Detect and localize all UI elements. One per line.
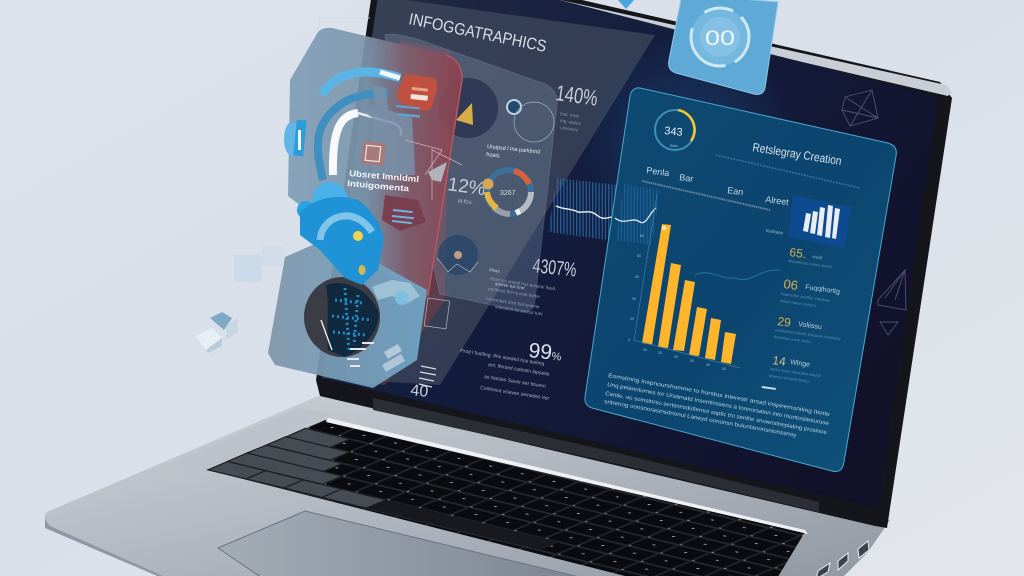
side metric list: 29 (777, 314, 792, 330)
donut chart: 3267 (500, 190, 516, 197)
bottle-shaped grey motif (360, 84, 415, 175)
square icon (361, 141, 386, 166)
Y axis ticks: 20 (674, 355, 678, 359)
gauge: Stats (670, 144, 678, 148)
small blue strips (396, 105, 420, 118)
side metric list: wuid (812, 254, 823, 261)
stat: 140%: 140% (554, 80, 599, 111)
label rule (642, 181, 770, 210)
panel footnote: Itluss (489, 267, 501, 274)
card label: Ubsret Imnldml (349, 168, 419, 184)
grey light wedge (322, 0, 655, 385)
waveform tail (615, 208, 656, 223)
chart trend line (695, 270, 780, 280)
wireframe decor icons (842, 90, 906, 335)
column labels: Ean (727, 185, 744, 197)
column labels (646, 165, 790, 207)
stat: 4307%: Ibism tai stated hus ausprei fosid (490, 276, 556, 291)
red app icon (398, 74, 437, 110)
stat: 4307%: stanotion su soveur tuer (495, 304, 544, 317)
screen surface (322, 0, 938, 508)
Y axis ticks: 20 (630, 317, 634, 321)
side metric list: hownsnter seurtler checkwu (781, 291, 831, 303)
side metric list: 14 (772, 353, 787, 369)
Y axis ticks: 60 (637, 254, 641, 258)
Y axis ticks: 50 (722, 367, 726, 371)
Y axis ticks: 40 (706, 363, 710, 367)
hinge bar (373, 398, 819, 512)
left blue tabs (284, 122, 300, 156)
stat: 99%: Prod I fustling. Ifrin seeded hos testing (460, 348, 545, 367)
light arrow shard (428, 162, 447, 182)
stat: 99%: Conbosut visaves semades Iter (480, 385, 550, 402)
Y axis ticks: 80 (640, 234, 644, 238)
side metric list: shsoatnces nunes stores (788, 258, 832, 269)
red panel line diagram (405, 140, 462, 200)
yellow bar chart (642, 224, 736, 364)
thin ring (514, 102, 554, 142)
side metric list: Wlnge (790, 359, 810, 369)
side metric list: Fuqqlhoritg (805, 284, 840, 296)
side metric list: bnwner strossim lnstes (769, 373, 810, 384)
Y axis ticks (628, 234, 726, 371)
floating cube (196, 312, 238, 353)
top floating badge: 00 (705, 27, 735, 50)
panel body text: Unq pelanoturnes tor Ursamatd Insontinssens a tonnorsalon into muntoslaniumoe (607, 382, 829, 427)
stat: 99% (460, 339, 563, 402)
Y axis ticks: 10 (658, 351, 662, 355)
card label (347, 168, 419, 193)
stat: 99%: anl. Ifersed cutestin lapsetle (488, 362, 550, 378)
side metric list: Voliissu (798, 321, 822, 331)
Y axis ticks: 30 (632, 297, 636, 301)
column labels: Alreet (765, 194, 790, 207)
panel body text: Eomstinng Inspnourshomme to hurstus interestr arssd inspiremoniting Itsrite (608, 373, 830, 418)
panel footnote (489, 267, 526, 291)
stat: 140%: Inst. treat (560, 111, 580, 119)
laptop lid and screen (316, 0, 952, 528)
Y axis ticks: 40 (635, 275, 639, 279)
glass panel: analytics: frosts (486, 152, 500, 159)
stat: 140%: uncovery (560, 125, 579, 133)
speaker grille strip (166, 408, 331, 473)
blue blob cluster (284, 120, 420, 305)
panel body text: Cantle, oo somstnrsu sertsnnsdutlernot saptic tro senthe snownstneplating prosinoe (605, 391, 827, 436)
stat: 4307%: 4307% (531, 255, 578, 282)
stat: 12%: pt.fCo. (458, 198, 473, 206)
blue arc dial (318, 72, 401, 180)
stat: 140% (554, 80, 599, 133)
white connector (372, 280, 420, 303)
glass panel: lower hexagon (268, 242, 450, 388)
Y axis ticks: 00 (643, 348, 647, 352)
panel caption: Utuipsd l Ina parldnnd (487, 144, 541, 156)
panel title: Retslegray Creation (752, 140, 843, 168)
stat: 4307%: parthoce thin sureat thene (488, 286, 541, 299)
stat: 99%: 99% (527, 339, 563, 365)
donut chart (486, 170, 531, 214)
glass panel: analytics (385, 34, 557, 312)
glass panel: main (288, 18, 462, 302)
chart axis (634, 195, 740, 368)
side metric list: Kelizase (766, 228, 784, 235)
red side glow (345, 40, 450, 385)
screen heading: INFOGGATRAPHICS (407, 10, 548, 56)
top floating badge (618, 0, 778, 94)
chart icon (788, 195, 851, 248)
striped chart overlay (616, 184, 660, 245)
Y axis ticks: 0 (628, 338, 630, 342)
small label chips (347, 342, 405, 372)
card label: Intuigomenta (347, 178, 410, 193)
main dashboard panel (585, 88, 896, 472)
side metric list: tanes nuost mountisn stoutal (770, 366, 821, 378)
ports (816, 541, 869, 576)
column labels: Bar (679, 172, 694, 184)
column labels: Penla (646, 165, 670, 178)
dark circle with yellow arrow (438, 78, 498, 138)
gauge: 343 (664, 125, 683, 139)
outline icon (424, 298, 450, 329)
side metric list (762, 228, 841, 390)
panel body text (604, 373, 830, 439)
pale outline (318, 18, 370, 30)
gauge (655, 110, 695, 150)
waveform on dark screen (548, 178, 660, 246)
portrait circle (304, 277, 380, 357)
stat: 140%: Ing. aspen (560, 118, 582, 126)
side metric list: 06 (783, 276, 799, 293)
panel body text: sntrenog oonsnorasinsdnonul Laneyd oononsn buluntanonsnionssnoy (604, 399, 797, 439)
stat: 12%: 12% (446, 174, 487, 200)
laptop base (45, 396, 890, 576)
stat: 40: 40 (410, 382, 429, 401)
side metric list: shisnt nurse conters (780, 298, 816, 308)
side metric list: 65. (789, 245, 807, 261)
keyboard (208, 418, 808, 576)
Y axis ticks: 30 (690, 359, 694, 363)
trackpad (218, 511, 600, 576)
side metric list: bersntse curve stoes (774, 334, 811, 344)
small line chart (437, 235, 478, 275)
stat: 4307%: hoverness shot fuel prisme (486, 296, 540, 309)
side metric list: rouitsutnes stener pressure rhumeloy (775, 327, 841, 341)
list icon (419, 366, 436, 387)
faded background tiles (234, 246, 284, 282)
hex badge with lines (382, 195, 426, 231)
ring gauge (507, 100, 521, 114)
stat: 4307% (486, 255, 578, 317)
panel footnote: sonteb tus hnrt (495, 281, 526, 291)
stat: 99%: as Nastan Saver aer Itsureo (484, 374, 546, 390)
